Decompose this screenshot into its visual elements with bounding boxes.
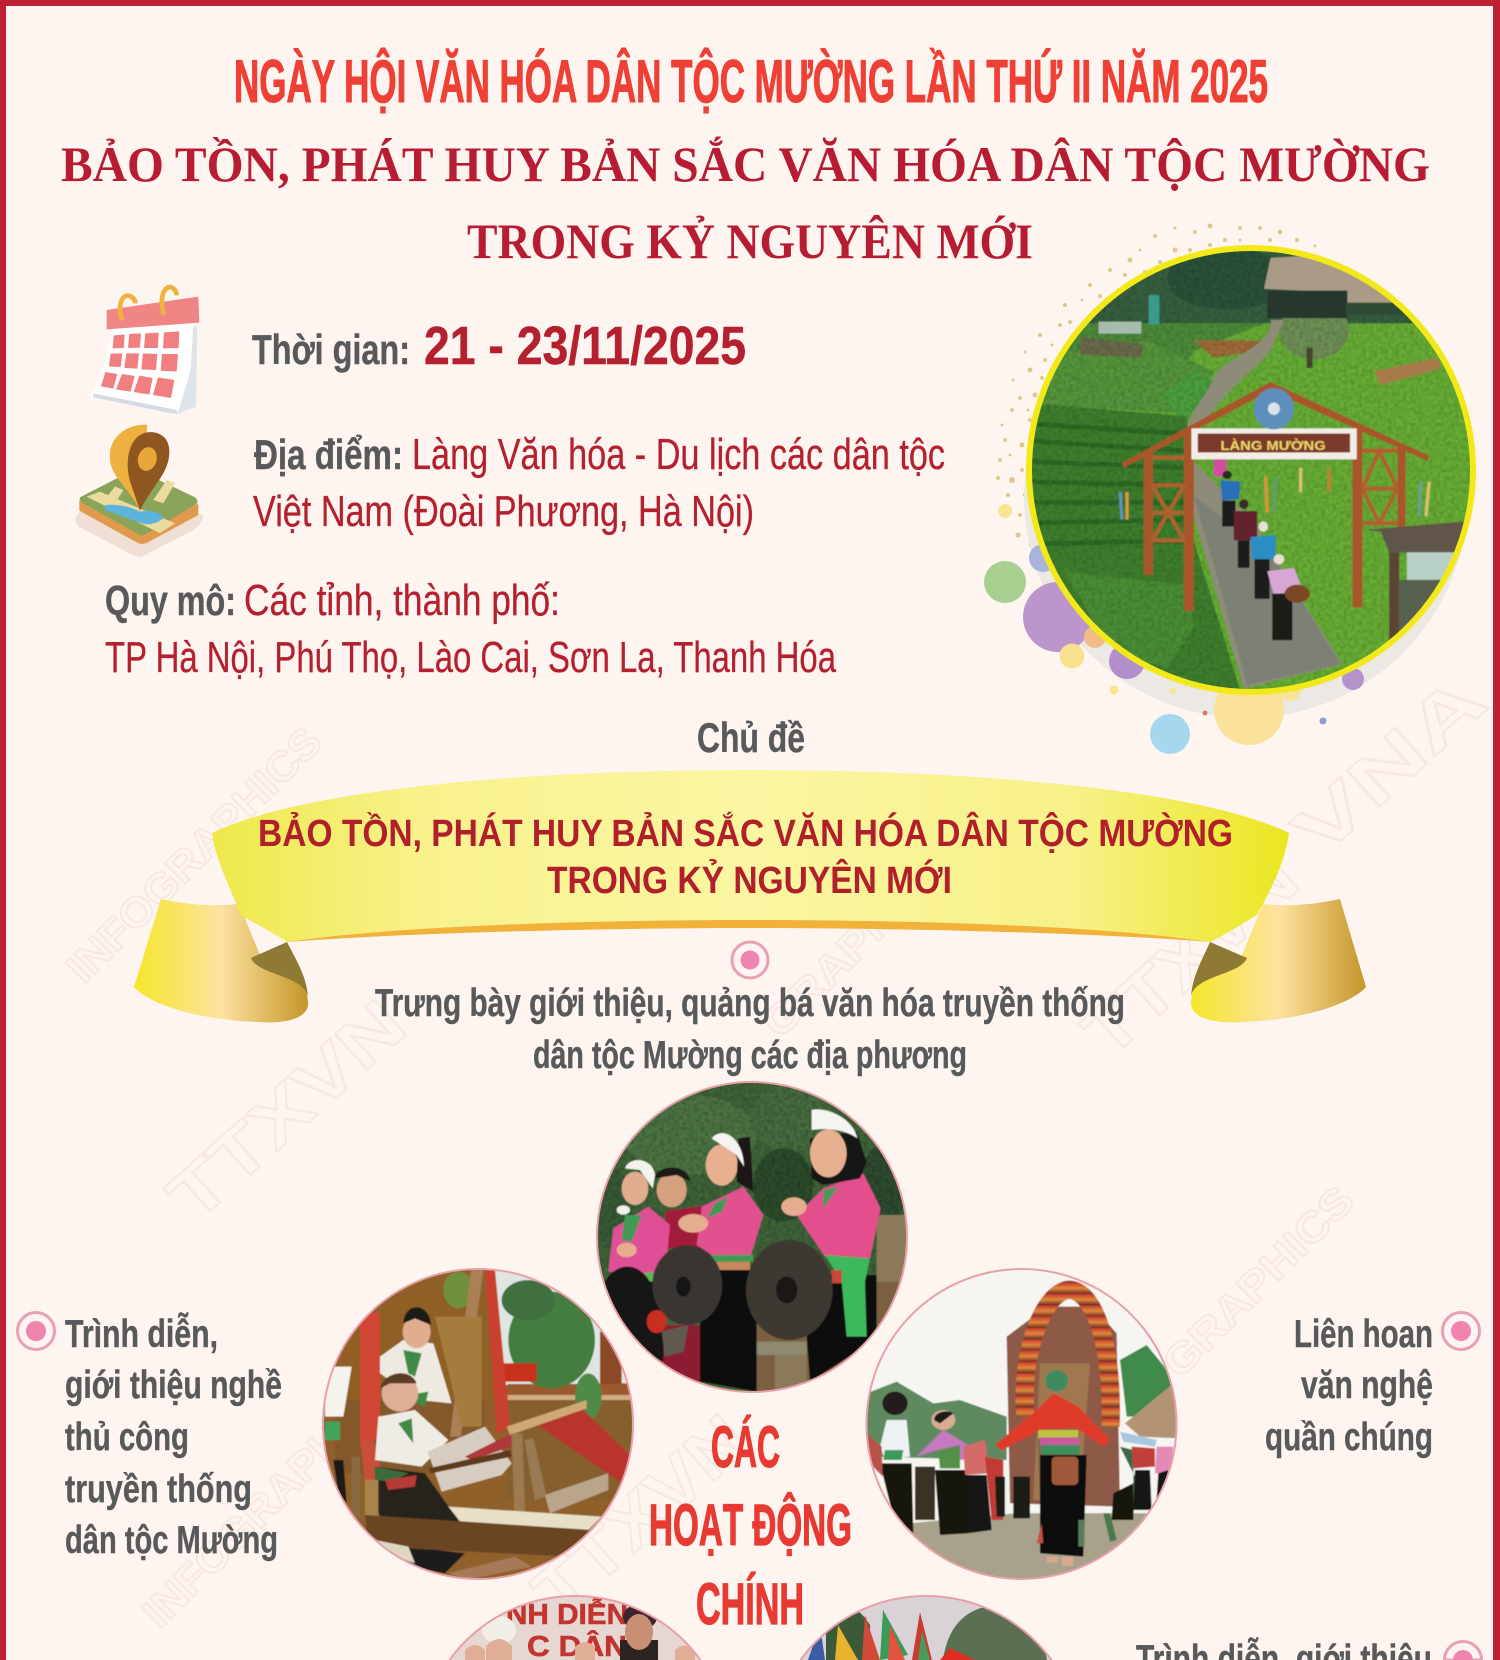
watermark — [57, 659, 1500, 1636]
watermark: TTXVN — [1068, 839, 1313, 1071]
red warp — [538, 1409, 629, 1483]
icon: map pin — [75, 425, 203, 557]
gong 3 — [746, 1240, 833, 1340]
activity: arts festival: Liên hoan — [1294, 1313, 1433, 1356]
activity: arts festival: quần chúng — [1265, 1416, 1433, 1459]
people — [1214, 459, 1226, 477]
left women — [880, 1420, 910, 1460]
window — [495, 1270, 602, 1385]
tree right — [1278, 318, 1350, 360]
woman 2 — [697, 1187, 763, 1258]
wooden beam — [450, 1270, 483, 1437]
photo: Làng Mường gate — [1026, 245, 1476, 695]
foliage texture — [1032, 251, 1470, 689]
sign — [1149, 295, 1159, 324]
forest — [1088, 251, 1414, 324]
ribbon banner — [134, 770, 1366, 1022]
thatched hut — [1263, 256, 1393, 304]
photo: performance banner: NH DIỄN — [506, 1597, 628, 1631]
bullet — [732, 942, 768, 978]
ribbon text line 2: TRONG KỶ NGUYÊN MỚI — [547, 858, 952, 902]
info: scale: Các tỉnh, thành phố: — [244, 576, 560, 625]
watermark: VNA — [1278, 659, 1500, 871]
bubble shadow — [1024, 274, 1468, 718]
maypole — [1007, 1307, 1120, 1507]
gong 1 — [604, 1266, 650, 1341]
activity: crafts: dân tộc Mường — [65, 1519, 278, 1562]
title block — [61, 48, 1430, 269]
textile strips — [360, 1313, 380, 1440]
activity: crafts: thủ công — [65, 1416, 189, 1459]
activity: exhibition — [375, 942, 1125, 1077]
info: location: Việt Nam (Đoài Phương, Hà Nội) — [253, 487, 754, 536]
info: location: Làng Văn hóa - Du lịch các dân tộc — [412, 430, 945, 479]
woman 1 — [608, 1207, 670, 1275]
info: location — [253, 430, 945, 536]
main dancer — [995, 1393, 1111, 1451]
info: scale — [105, 576, 836, 682]
front woman — [375, 1410, 448, 1467]
man — [665, 1206, 703, 1248]
gong 2 — [652, 1245, 722, 1325]
central heading: CHÍNH — [696, 1572, 804, 1637]
red flower — [647, 1310, 667, 1333]
photo: Làng Mường gate: LÀNG MƯỜNG — [1220, 438, 1326, 453]
activity: arts festival: văn nghệ — [1301, 1364, 1433, 1407]
shrubs left — [1027, 341, 1214, 413]
tea field — [1032, 404, 1240, 689]
info: location: Địa điểm: — [254, 431, 403, 478]
hedge texture — [598, 1083, 904, 1281]
photo: festival flags — [790, 1596, 1065, 1660]
arch — [1025, 1290, 1111, 1427]
ground — [910, 1513, 1160, 1590]
photo: women with gongs — [596, 1081, 908, 1393]
woman 3 — [797, 1173, 881, 1258]
plant — [508, 1292, 595, 1388]
central heading: HOẠT ĐỘNG — [649, 1493, 852, 1558]
photo: weaving — [322, 1268, 634, 1580]
flag vase — [502, 1363, 537, 1382]
watermark: INFOGRAPHICS — [133, 1363, 407, 1636]
info: scale: TP Hà Nội, Phú Thọ, Lào Cai, Sơn La, Thanh Hóa — [105, 633, 836, 682]
left person — [325, 1367, 352, 1417]
photo: performance banner — [440, 1596, 710, 1660]
watermark: GRAPHICS — [753, 836, 963, 1046]
activity: crafts: Trình diễn, — [65, 1312, 218, 1356]
activity: crafts — [18, 1312, 282, 1562]
icon: calendar — [91, 287, 199, 414]
sign board — [1191, 428, 1357, 459]
floor — [448, 1507, 602, 1530]
gate — [1122, 382, 1429, 611]
watermark: TTXVN — [153, 984, 421, 1236]
value: date: 21 - 23/11/2025 — [424, 316, 746, 376]
pole legs — [1037, 1523, 1043, 1543]
activity: exhibition: Trưng bày giới thiệu, quảng bá văn hóa truyền thống — [375, 982, 1125, 1025]
watermark: GRAPHICS — [1153, 1176, 1363, 1386]
path — [1187, 320, 1342, 688]
woven cloth — [428, 1427, 512, 1492]
gong — [1254, 388, 1294, 429]
activity: crafts: truyền thống — [65, 1468, 252, 1511]
info: time — [252, 316, 746, 376]
ribbon folds — [251, 942, 308, 996]
subtitle line 1: BẢO TỒN, PHÁT HUY BẢN SẮC VĂN HÓA DÂN TỘC MƯỜNG — [61, 135, 1430, 192]
ribbon body — [212, 770, 1289, 942]
bullet — [18, 1312, 54, 1350]
label: time: Thời gian: — [252, 326, 410, 373]
central heading: CÁC — [711, 1415, 780, 1480]
loom frame — [507, 1400, 587, 1435]
activity: arts festival — [1265, 1312, 1480, 1459]
activity: crafts: giới thiệu nghề — [65, 1364, 282, 1407]
roof — [1125, 1383, 1178, 1438]
hut bottom right — [1364, 521, 1464, 552]
bullet — [1442, 1312, 1480, 1350]
bullet — [1444, 1642, 1482, 1660]
activity: exhibition: dân tộc Mường các địa phương — [533, 1034, 967, 1077]
info: scale: Quy mô: — [105, 577, 236, 624]
central heading — [649, 1415, 852, 1637]
dirt right — [1374, 358, 1441, 385]
watermark: TTXVN — [518, 1399, 763, 1631]
theme heading: Chủ đề — [697, 714, 805, 761]
lanterns — [1120, 468, 1429, 520]
left tail — [134, 899, 308, 1022]
right people — [1120, 1432, 1157, 1447]
subtitle line 2: TRONG KỶ NGUYÊN MỚI — [467, 213, 1033, 269]
ribbon underside — [287, 920, 1210, 942]
back woman — [380, 1340, 452, 1403]
watermark: INFOGRAPHICS — [57, 718, 331, 991]
right tail — [1191, 899, 1366, 1022]
trees — [867, 1382, 1007, 1460]
ribbon text line 1: BẢO TỒN, PHÁT HUY BẢN SẮC VĂN HÓA DÂN TỘC MƯỜNG — [258, 810, 1233, 855]
photo: folk dance — [866, 1268, 1178, 1580]
decorative bubbles and stars — [984, 224, 1468, 754]
